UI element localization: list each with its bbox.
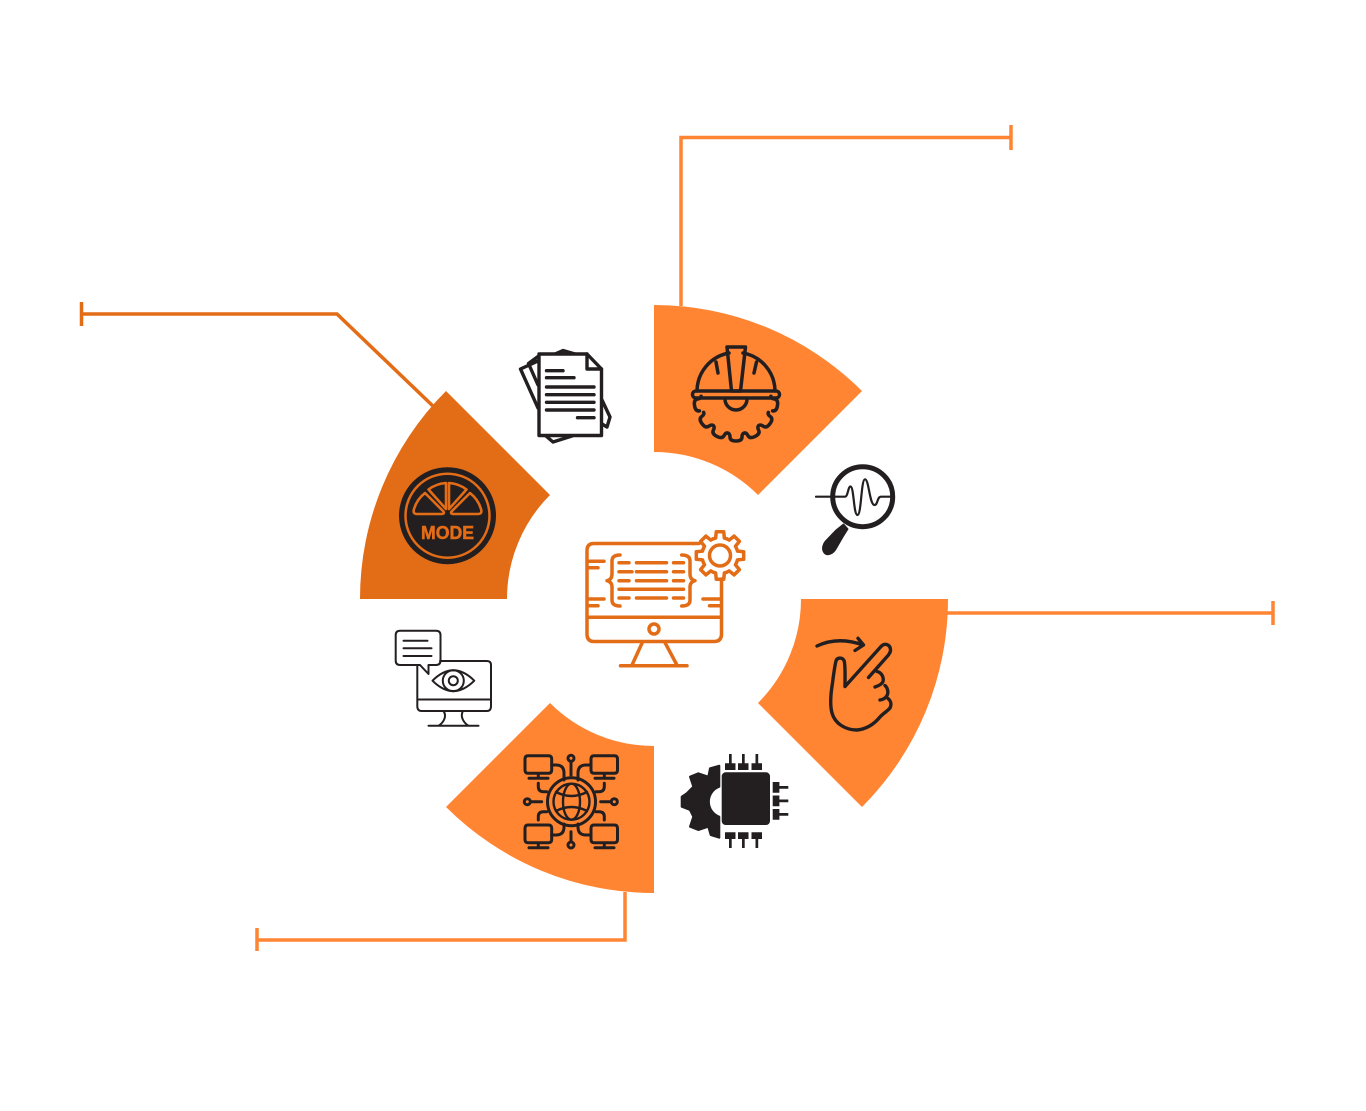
monitor stand bbox=[620, 642, 687, 666]
monitor body bbox=[417, 661, 491, 711]
hat brim bbox=[692, 391, 780, 398]
curly braces bbox=[607, 555, 695, 606]
icon: magnifier with signal wave bbox=[816, 467, 893, 555]
half gear bbox=[682, 766, 719, 838]
monitor stand bbox=[428, 711, 478, 726]
power button bbox=[649, 624, 659, 634]
code lines bbox=[619, 563, 684, 598]
panel: bottom ring segment bbox=[446, 703, 654, 893]
monitors bbox=[525, 756, 552, 778]
monitor frame bbox=[587, 544, 722, 642]
hat ridge bbox=[727, 347, 746, 391]
icon: MODE badge bbox=[399, 467, 496, 564]
speech bubble bbox=[396, 631, 440, 674]
chip bottom pins bbox=[725, 832, 762, 848]
settings gear bbox=[696, 532, 744, 579]
chip right pins bbox=[773, 782, 788, 820]
connector: right segment bbox=[947, 601, 1273, 625]
swipe arrow bbox=[817, 638, 864, 650]
chip top pins bbox=[725, 754, 762, 770]
panel: left ring segment bbox=[360, 391, 550, 599]
globe bbox=[548, 778, 596, 826]
eye bbox=[432, 670, 474, 691]
hat vents bbox=[716, 362, 756, 373]
panel: right ring segment bbox=[758, 599, 948, 807]
citrus slice bbox=[414, 483, 481, 514]
gear bbox=[693, 396, 779, 441]
chip body bbox=[722, 772, 770, 825]
hat dome bbox=[697, 353, 775, 391]
icon: hard hat with gear bbox=[692, 347, 780, 441]
strap bbox=[725, 399, 747, 410]
badge label: MODE bbox=[421, 523, 474, 543]
badge ring bbox=[406, 474, 490, 558]
connector: bottom segment bbox=[257, 892, 625, 951]
icon: chip with gear bbox=[682, 754, 788, 848]
icon: globe network bbox=[524, 755, 618, 848]
connector: top segment bbox=[681, 125, 1011, 306]
nodes and links bbox=[568, 755, 574, 761]
icon: stack of documents bbox=[520, 350, 610, 442]
panel: top ring segment bbox=[654, 305, 862, 495]
hand outline bbox=[831, 644, 891, 730]
icon: monitor with eye and speech bubble bbox=[396, 631, 491, 726]
icon: hand with swipe gesture bbox=[817, 638, 891, 730]
badge disc bbox=[399, 467, 496, 564]
connector: left segment bbox=[82, 302, 435, 408]
side dashes bbox=[588, 561, 720, 606]
icon: central monitor with code and gear bbox=[587, 532, 744, 666]
